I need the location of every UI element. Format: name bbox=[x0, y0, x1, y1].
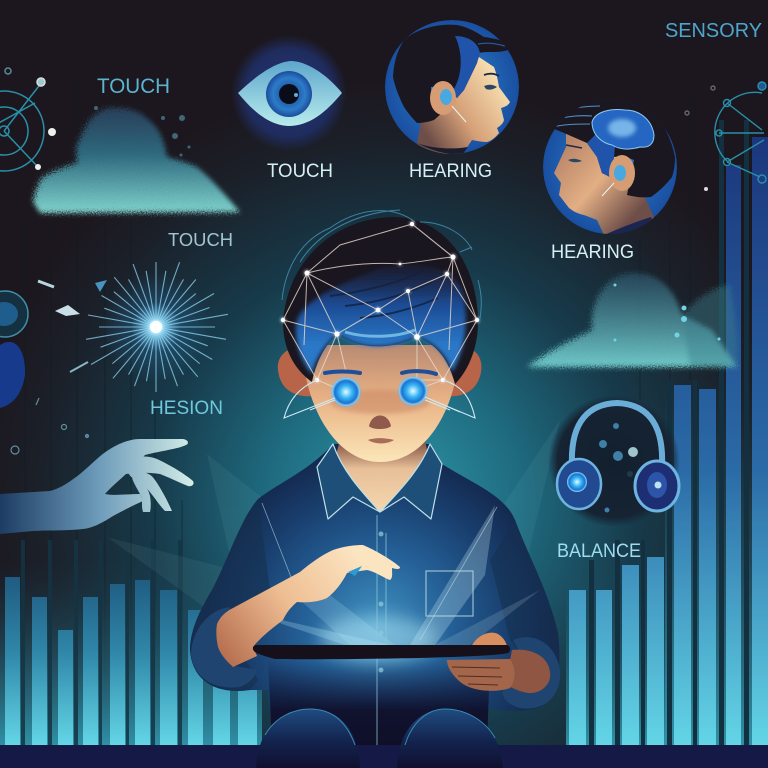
icon: headphones bbox=[548, 395, 680, 527]
freckle shade bbox=[330, 390, 430, 414]
face bbox=[302, 345, 460, 462]
floor band bbox=[0, 745, 768, 768]
boy bbox=[190, 210, 560, 768]
left forearm and hand bbox=[216, 545, 400, 667]
left sleeve cuff bbox=[191, 607, 257, 688]
face mesh bbox=[283, 224, 477, 392]
radar diagram: left bbox=[0, 68, 56, 171]
label: touch 1: TOUCH bbox=[97, 75, 170, 98]
cloud: right bbox=[527, 273, 737, 367]
ears bbox=[278, 348, 481, 396]
neck bbox=[333, 440, 430, 512]
collar bbox=[317, 444, 442, 519]
label: balance: BALANCE bbox=[557, 541, 641, 562]
light beams across background bbox=[107, 420, 560, 640]
icon: eye bbox=[231, 35, 347, 151]
fingertip highlights bbox=[348, 566, 362, 576]
hand reaching from left bbox=[0, 439, 194, 534]
mesh nodes bbox=[281, 222, 479, 382]
nose bbox=[369, 416, 391, 429]
particles near left cloud bbox=[94, 106, 190, 156]
eyebrows bbox=[325, 371, 436, 374]
wrist and right hand bbox=[447, 633, 550, 693]
hair bbox=[283, 217, 478, 384]
bar columns: left bbox=[0, 540, 262, 745]
shirt torso and sleeves bbox=[190, 444, 559, 745]
bar columns: right bbox=[566, 120, 768, 745]
label: touch 3: TOUCH bbox=[168, 230, 233, 250]
mouth bbox=[368, 438, 394, 443]
cloud: left bbox=[33, 108, 240, 213]
eye ray lines bbox=[284, 380, 475, 418]
icon: hearing profile with brain facing left bbox=[543, 98, 677, 240]
right sleeve cuff bbox=[503, 637, 560, 709]
placket bbox=[377, 515, 386, 745]
particles near right cloud bbox=[614, 284, 720, 342]
light beams from tablet bbox=[260, 503, 540, 660]
label: hearing 2: HEARING bbox=[551, 242, 634, 263]
label: sensory: SENSORY bbox=[665, 20, 762, 42]
radar diagram: right bbox=[685, 82, 766, 191]
orb: left edge bbox=[0, 291, 28, 408]
icon: hearing profile facing right bbox=[385, 20, 519, 155]
knees bbox=[256, 709, 503, 768]
wispy hair strands bbox=[282, 210, 481, 318]
label: hesion: HESION bbox=[150, 398, 223, 419]
tablet bbox=[253, 645, 510, 659]
label: hearing 1: HEARING bbox=[409, 161, 492, 182]
pocket bbox=[426, 571, 473, 616]
glowing eyes bbox=[332, 377, 427, 406]
particles near hand bbox=[11, 398, 88, 454]
label: touch 2: TOUCH bbox=[267, 161, 333, 182]
icon: starburst bbox=[38, 262, 228, 392]
